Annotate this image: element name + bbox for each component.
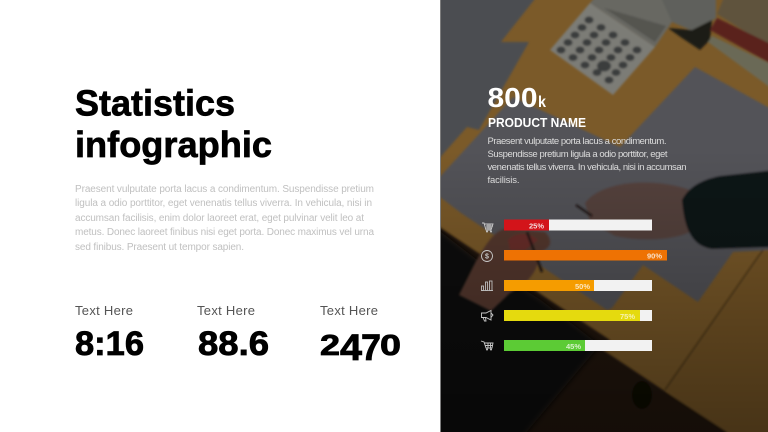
icon: shopping cart bbox=[481, 341, 493, 350]
bar: 90%: 90% bbox=[647, 252, 662, 260]
big number: 800k: k bbox=[538, 94, 546, 111]
stat: 2470: 0 bbox=[380, 330, 401, 362]
title bbox=[75, 82, 272, 165]
bar: 45%: 45% bbox=[566, 342, 581, 351]
stat: 8:16: 8:16 bbox=[75, 325, 144, 363]
photo panel: dimmed desk photograph bbox=[436, 0, 768, 432]
stat: 2470: Text Here bbox=[320, 303, 378, 318]
icon: bar chart bbox=[481, 281, 493, 290]
upper hand and sleeve bbox=[585, 182, 690, 239]
bar: 25%: 25% bbox=[529, 221, 544, 230]
body paragraph: metus. Donec laoreet finibus nisi eget porta. Donec maximus vel urna bbox=[75, 227, 374, 238]
product description: facilisis. bbox=[488, 175, 520, 186]
bar: 45% bbox=[504, 340, 652, 351]
body paragraph: Praesent vulputate porta lacus a condimentum. Suspendisse pretium bbox=[75, 184, 374, 195]
bar: 75%: 75% bbox=[620, 312, 635, 321]
bar: 50%: 50% bbox=[575, 282, 590, 291]
icon: dollar coin: $ bbox=[485, 254, 489, 260]
product name heading: PRODUCT NAME bbox=[488, 116, 586, 130]
product description bbox=[488, 136, 686, 186]
left panel edge line bbox=[440, 0, 441, 432]
title: infographic bbox=[75, 124, 272, 165]
icon: basket bbox=[482, 223, 493, 232]
bar: 25% bbox=[504, 220, 652, 230]
title: Statistics bbox=[75, 82, 235, 124]
bar: 90% bbox=[504, 250, 667, 260]
icon: dollar coin bbox=[482, 250, 492, 262]
calculator bbox=[590, 0, 672, 47]
body paragraph: accumsan facilisis, enim dolor laoreet erat, eget pulvinar velit leo at bbox=[75, 213, 364, 224]
stat: 2470: 7 bbox=[361, 327, 381, 368]
stat: 2470: 4 bbox=[340, 327, 362, 368]
body paragraph: ligula a odio porttitor, eget venenatis tellus viverra. In vehicula, nisi in bbox=[75, 198, 372, 209]
stat: 88.6: 88.6 bbox=[198, 325, 269, 363]
stat: 2470: 2 bbox=[320, 330, 340, 362]
body paragraph bbox=[75, 184, 374, 253]
big number: 800k: 800 bbox=[488, 82, 538, 113]
top-right stack of binders and papers bbox=[661, 0, 718, 32]
stat: 88.6: Text Here bbox=[197, 303, 255, 318]
dark foreground arm bbox=[436, 228, 600, 432]
stat: 88.6 bbox=[197, 303, 269, 363]
product description: venenatis tellus viverra. In vehicula, nisi in accumsan bbox=[488, 162, 686, 173]
bar: 50% bbox=[504, 280, 652, 291]
bar: 75% bbox=[504, 310, 652, 321]
darkening overlay bbox=[441, 200, 768, 432]
stat: 2470 bbox=[320, 303, 401, 368]
lower hand and pen bbox=[459, 205, 592, 311]
body paragraph: sed finibus. Praesent ut tempor sapien. bbox=[75, 242, 244, 253]
stat: 8:16: Text Here bbox=[75, 303, 133, 318]
product description: Suspendisse pretium ligula a odio porttitor, eget bbox=[488, 149, 668, 160]
product description: Praesent vulputate porta lacus a condimentum. bbox=[488, 136, 666, 147]
table leg bbox=[632, 381, 652, 409]
stat: 8:16 bbox=[75, 303, 144, 363]
icon: megaphone bbox=[482, 310, 493, 321]
